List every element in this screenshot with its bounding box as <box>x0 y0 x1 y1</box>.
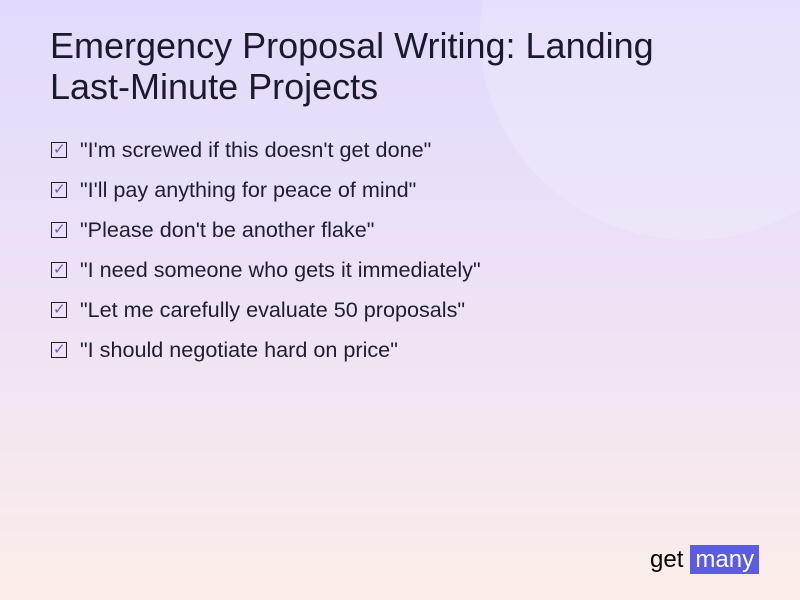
logo <box>650 545 759 574</box>
checklist: "Please don't be another flake" <box>80 217 374 242</box>
checklist: "I'm screwed if this doesn't get done" <box>80 137 431 162</box>
title: Emergency Proposal Writing: Landing <box>50 25 654 66</box>
checklist: ✓ <box>53 141 66 158</box>
checklist: ✓ <box>53 301 66 318</box>
checklist <box>51 137 481 362</box>
checklist: "Let me carefully evaluate 50 proposals" <box>80 297 465 322</box>
checklist: ✓ <box>53 261 66 278</box>
checklist: ✓ <box>53 221 66 238</box>
checklist: ✓ <box>53 181 66 198</box>
logo: get <box>650 546 683 572</box>
checklist: "I should negotiate hard on price" <box>80 337 398 362</box>
checklist: "I'll pay anything for peace of mind" <box>80 177 416 202</box>
checklist: "I need someone who gets it immediately" <box>80 257 481 282</box>
logo: many <box>695 546 754 573</box>
title <box>50 25 654 107</box>
checklist: ✓ <box>53 341 66 358</box>
title: Last-Minute Projects <box>50 66 378 107</box>
